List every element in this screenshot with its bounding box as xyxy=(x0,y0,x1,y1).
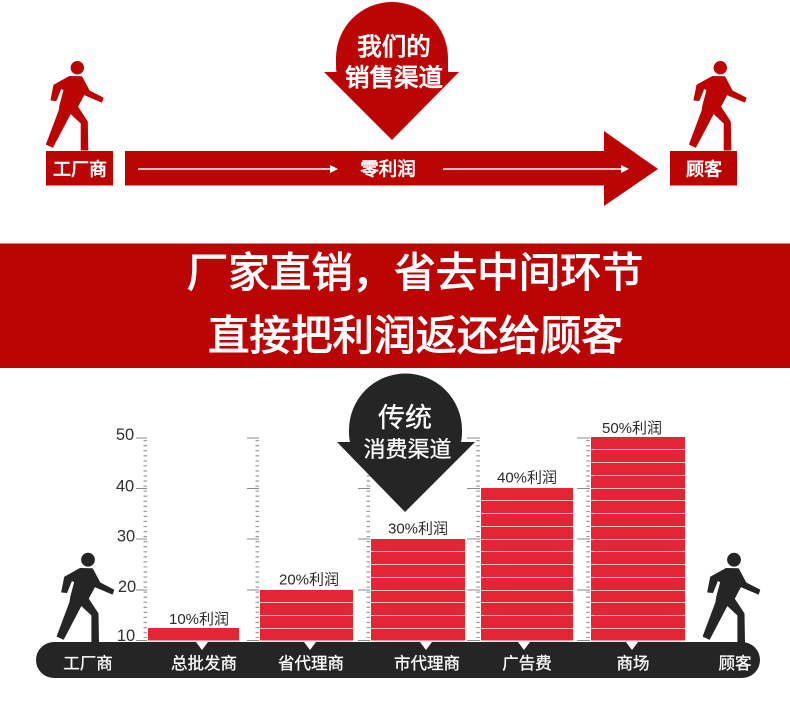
axis labels: 50 xyxy=(116,426,134,444)
headline line 1: 厂家直销，省去中间环节 xyxy=(187,249,643,296)
channel timeline bar xyxy=(36,642,760,678)
arrow: zero profit xyxy=(125,131,658,206)
axis labels: 40 xyxy=(116,478,134,496)
bar: 50%: 50%利润 xyxy=(602,420,662,437)
panel: traditional channel chart xyxy=(36,374,760,678)
bar: 40%: 40%利润 xyxy=(497,470,557,486)
scale ticks xyxy=(136,438,590,640)
bar: 30%: 30%利润 xyxy=(388,520,448,538)
callout: our sales channel xyxy=(324,2,459,140)
bar: 40% xyxy=(481,470,573,640)
channel timeline bar: 总批发商 xyxy=(171,654,237,673)
channel timeline bar: 商场 xyxy=(616,654,650,673)
callout: our sales channel: 销售渠道 xyxy=(345,64,443,92)
panel: direct sales channel xyxy=(46,2,746,206)
callout: our sales channel: 我们的 xyxy=(357,33,431,61)
channel timeline bar: 广告费 xyxy=(502,654,552,673)
callout: traditional consumption channel: 传统 xyxy=(378,403,432,433)
label box: customer: 顾客 xyxy=(686,160,722,180)
label box: factory xyxy=(46,151,113,186)
axis labels: 30 xyxy=(117,528,135,546)
arrow: zero profit: 零利润 xyxy=(360,158,416,180)
channel timeline bar: 市代理商 xyxy=(394,654,460,673)
label box: factory: 工厂商 xyxy=(53,160,107,180)
bar: 30% xyxy=(371,520,465,640)
banner: headline xyxy=(0,244,790,368)
icon: customer walker dark xyxy=(703,553,760,642)
thin arrow left xyxy=(138,165,338,173)
callout: traditional consumption channel xyxy=(337,374,475,512)
bar: 20%: 20%利润 xyxy=(279,572,339,588)
headline line 2: 直接把利润返还给顾客 xyxy=(208,312,623,359)
channel timeline bar: 省代理商 xyxy=(278,654,344,673)
axis labels: 20 xyxy=(118,578,136,596)
label box: customer xyxy=(670,151,737,186)
bar: 20% xyxy=(260,572,353,640)
icon: factory walker dark xyxy=(57,553,114,642)
thin arrow right xyxy=(443,165,629,173)
icon: customer walker red xyxy=(690,61,746,150)
channel timeline bar: 顾客 xyxy=(718,654,752,673)
channel timeline bar: 工厂商 xyxy=(63,654,113,673)
callout: traditional consumption channel: 消费渠道 xyxy=(363,437,452,462)
axis labels: 10 xyxy=(117,627,135,645)
axis labels xyxy=(116,426,136,645)
bar: 10% xyxy=(148,611,239,640)
bar: 50% xyxy=(591,420,685,640)
icon: factory walker red xyxy=(46,61,103,150)
bar: 10%: 10%利润 xyxy=(169,611,229,628)
